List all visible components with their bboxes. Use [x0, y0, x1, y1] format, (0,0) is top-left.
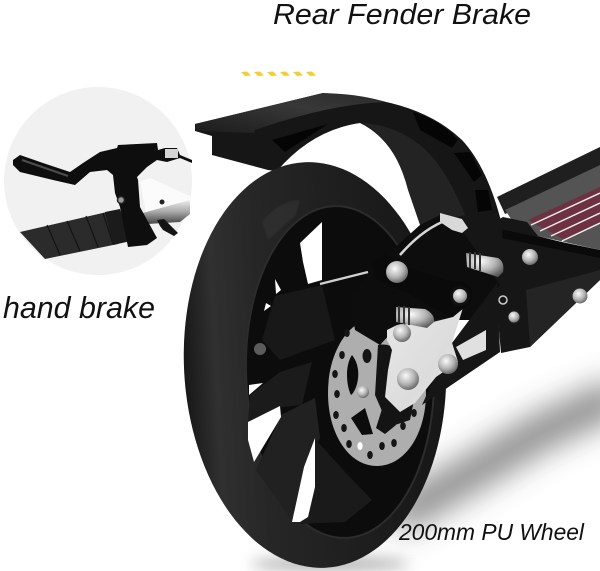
inset circle — [4, 87, 192, 275]
bracket nut — [508, 311, 520, 323]
handlebar tube — [143, 199, 190, 224]
brake disc — [328, 318, 426, 466]
white washer — [499, 296, 507, 304]
caliper bolts — [386, 261, 408, 283]
caliper arm — [373, 255, 473, 317]
disc holes — [332, 329, 417, 459]
tyre tread wear — [262, 200, 300, 240]
hand brake inset — [4, 87, 192, 275]
disc inner slot — [376, 409, 396, 434]
brake cable — [320, 272, 368, 284]
hand brake label: hand brake — [3, 290, 155, 325]
grip — [20, 212, 118, 259]
caliper body — [350, 215, 500, 345]
axle bolt — [254, 343, 266, 355]
bracket bolt — [522, 249, 538, 265]
deck — [466, 147, 600, 353]
fender top face — [195, 93, 386, 133]
rim gaps — [248, 222, 322, 522]
deck top rail — [497, 147, 600, 214]
red stripes — [528, 187, 600, 240]
wheel — [174, 155, 456, 571]
cable end — [440, 213, 468, 233]
wheel size label: 200mm PU Wheel — [398, 519, 585, 545]
rim — [240, 203, 440, 541]
tyre — [174, 155, 456, 571]
spokes — [248, 285, 372, 524]
bracket bolt — [572, 288, 588, 304]
ground shadow — [250, 395, 600, 571]
bracket lit face — [526, 270, 600, 347]
caliper assembly — [320, 213, 507, 412]
lower mounting arm — [422, 283, 500, 405]
disc bolt — [357, 386, 369, 398]
yellow dashed accent — [241, 72, 316, 76]
fender cutouts — [272, 124, 328, 152]
slot highlight — [456, 330, 486, 360]
fender arc — [195, 93, 505, 300]
deck surface — [505, 165, 600, 250]
upper white clamp — [140, 178, 190, 212]
cable adjuster — [165, 149, 178, 158]
fender inner wall — [362, 123, 465, 225]
disc centre hub — [375, 344, 418, 425]
rear fender — [195, 93, 505, 300]
silver plate — [385, 298, 466, 412]
plate bolts — [393, 324, 411, 342]
lower clamp bracket — [157, 219, 178, 236]
brake lever — [13, 143, 192, 247]
rail — [466, 222, 600, 258]
frame bracket — [480, 217, 600, 353]
